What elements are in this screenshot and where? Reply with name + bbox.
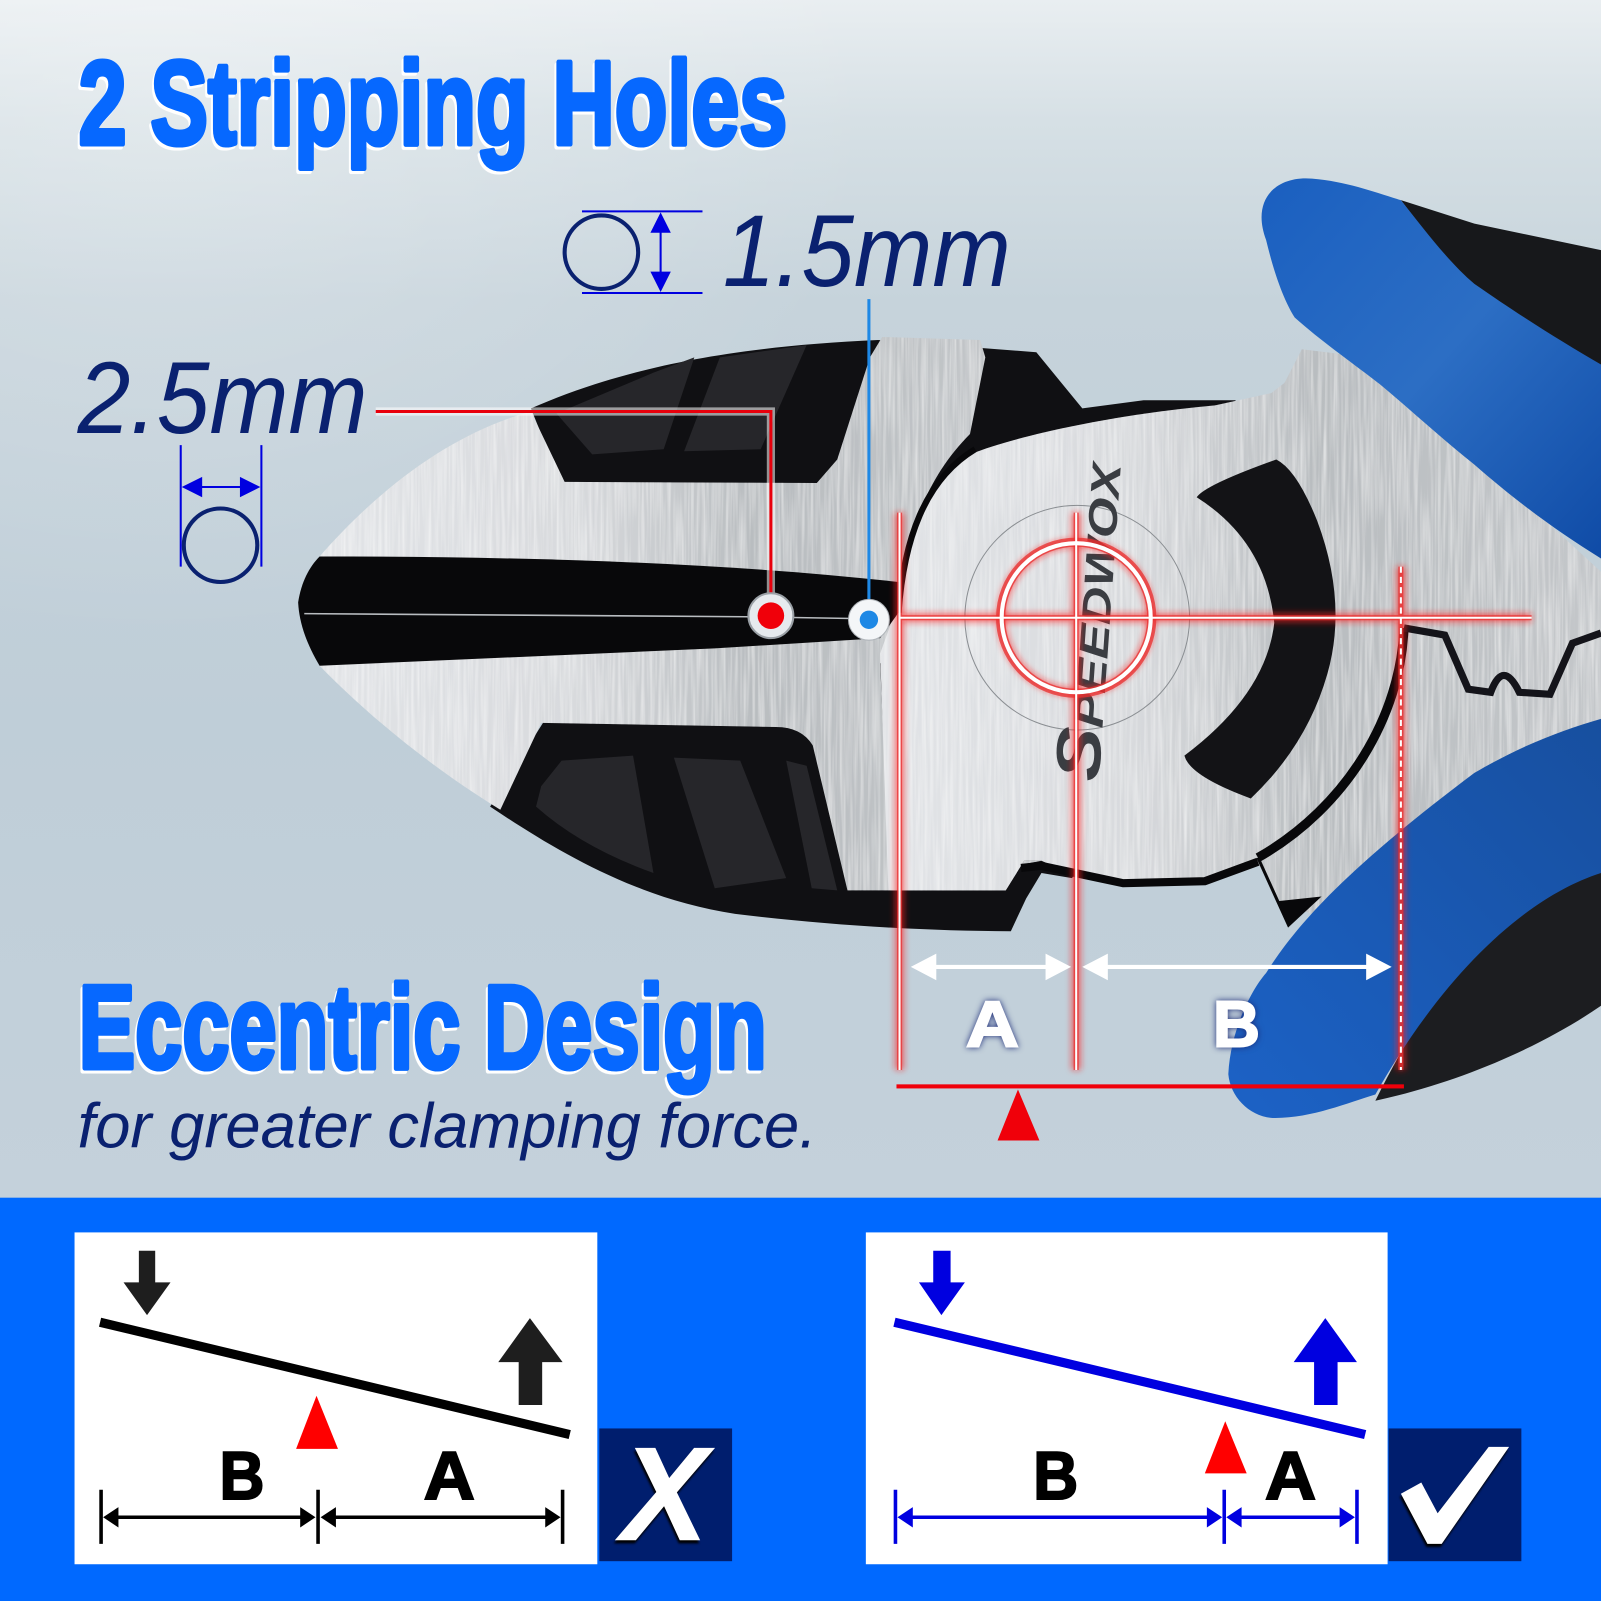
leader: 2.5mm hole bbox=[376, 411, 793, 638]
label A: A bbox=[1265, 1439, 1316, 1514]
label B: B bbox=[1033, 1439, 1078, 1514]
blue band bbox=[0, 1198, 1601, 1601]
lower pocket facets bbox=[536, 756, 837, 890]
label: A: A bbox=[966, 988, 1019, 1061]
logo: SPEEDWOX bbox=[1043, 457, 1135, 783]
arrow down bbox=[124, 1251, 171, 1315]
dimension arrowheads bbox=[897, 1507, 1355, 1527]
dimension lines bbox=[895, 1490, 1357, 1544]
icon: 1.5mm hole dimension bbox=[565, 211, 702, 293]
badge: X: X bbox=[615, 1421, 715, 1569]
lever bar bbox=[894, 1322, 1365, 1435]
label: B: B bbox=[1213, 988, 1260, 1061]
fulcrum bbox=[1205, 1421, 1247, 1473]
arrow up bbox=[1294, 1318, 1357, 1405]
badge: X bbox=[599, 1421, 732, 1569]
black jaw slot bbox=[298, 556, 899, 666]
arrow down bbox=[919, 1251, 965, 1315]
background bbox=[0, 0, 1601, 1205]
label B: B bbox=[220, 1439, 264, 1514]
lever beam and fulcrum bbox=[896, 1084, 1404, 1141]
arrow up bbox=[498, 1318, 563, 1405]
heading: Eccentric Design: Eccentric Design bbox=[79, 962, 767, 1094]
panel: incorrect lever bbox=[75, 1232, 597, 1564]
label: 2.5mm: 2.5mm bbox=[77, 341, 368, 455]
eccentric design overlay bbox=[900, 513, 1532, 1070]
pivot outline bbox=[899, 449, 1601, 925]
black head body bbox=[490, 340, 1266, 931]
lever bar bbox=[100, 1322, 570, 1435]
upper grip bbox=[1262, 178, 1601, 559]
label: 1.5mm: 1.5mm bbox=[723, 194, 1011, 308]
title: 2 Stripping Holes: 2 Stripping Holes bbox=[79, 38, 787, 170]
leader: 1.5mm hole bbox=[848, 299, 889, 640]
dimension lines bbox=[101, 1490, 563, 1544]
pliers photo bbox=[298, 178, 1601, 1118]
metal jaw and plate bbox=[320, 337, 1601, 919]
badge: check mark bbox=[1389, 1428, 1521, 1561]
subheading: for greater clamping force. bbox=[78, 1092, 817, 1162]
arrow: span A bbox=[911, 954, 1071, 980]
label A: A bbox=[424, 1439, 475, 1514]
rubber pad bbox=[1184, 459, 1336, 798]
upper pocket facets bbox=[556, 345, 807, 454]
panel: correct lever bbox=[866, 1232, 1388, 1564]
dimension arrowheads bbox=[103, 1507, 561, 1527]
arrow: span B bbox=[1082, 954, 1392, 980]
icon: 2.5mm hole dimension bbox=[181, 445, 261, 582]
fulcrum bbox=[296, 1396, 338, 1449]
lower grip bbox=[1228, 719, 1601, 1118]
